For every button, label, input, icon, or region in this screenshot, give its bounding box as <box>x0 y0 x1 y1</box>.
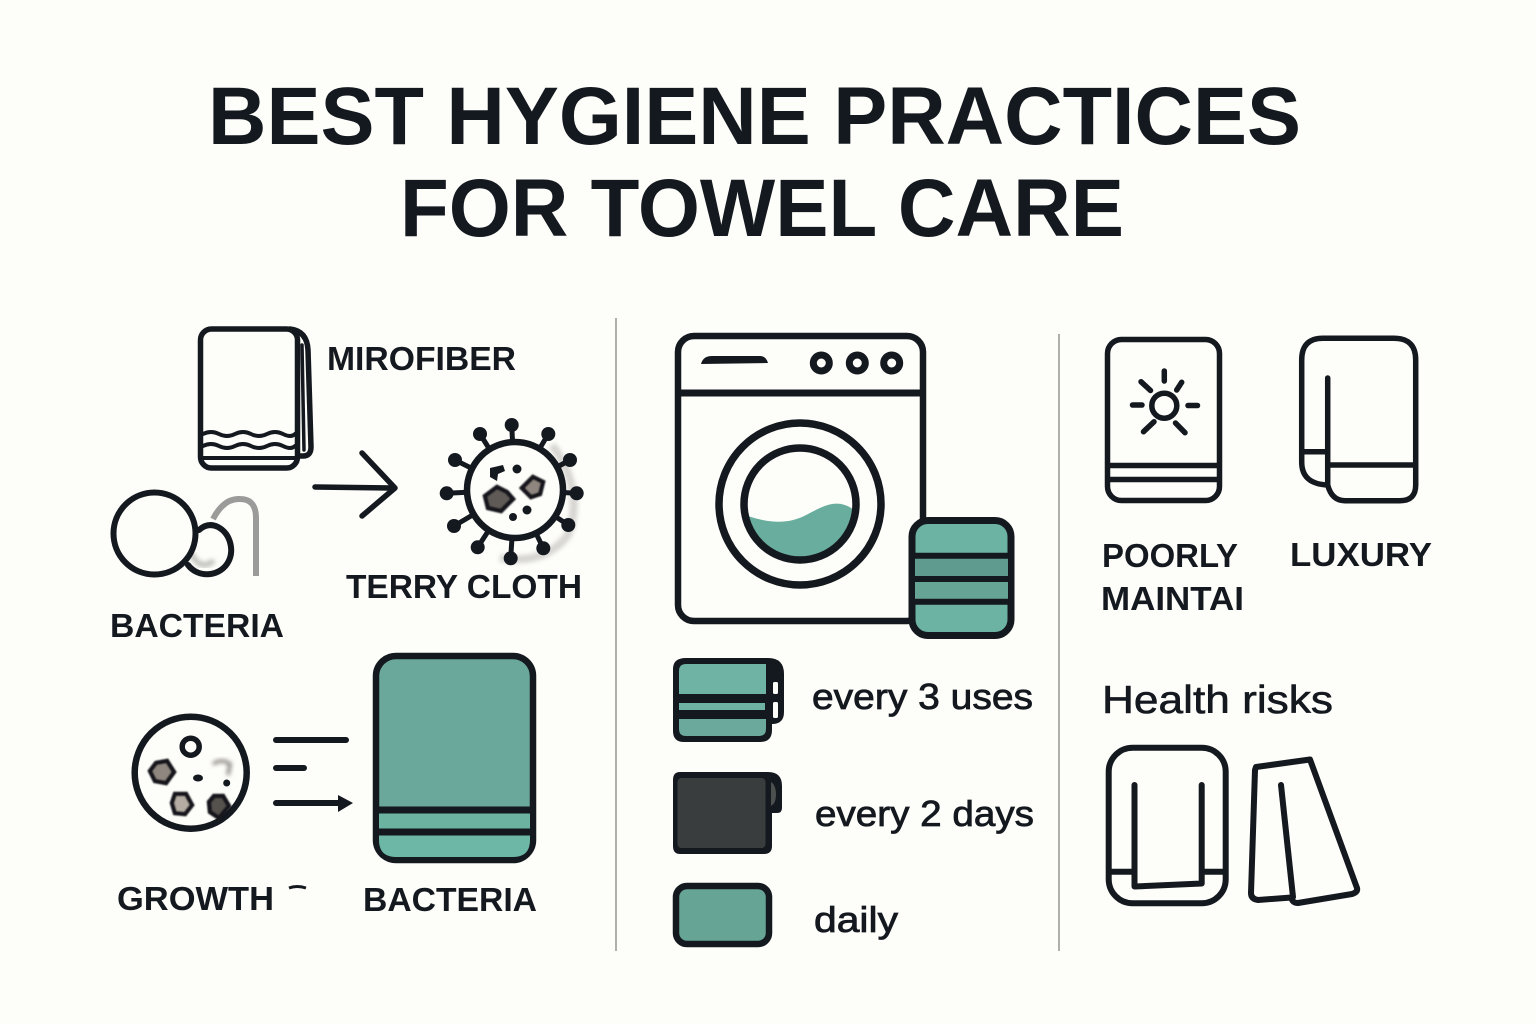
label: every 2 days: every 2 days <box>815 793 1034 834</box>
label: luxury: LUXURY <box>1290 536 1432 573</box>
label: poorly maintained <box>1101 537 1244 617</box>
icon: overlapping circles <box>114 492 256 576</box>
title: FOR TOWEL CARE <box>400 163 1124 254</box>
icon: folded towel <box>1251 760 1357 903</box>
icon: luxury towel <box>1302 338 1416 501</box>
label: terry cloth: TERRY CLOTH <box>346 568 582 605</box>
title: BEST HYGIENE PRACTICES <box>208 71 1301 162</box>
icon: teal towel small <box>676 886 769 944</box>
title <box>208 71 1301 254</box>
label: poorly maintained: MAINTAI <box>1101 580 1244 617</box>
label: poorly maintained: POORLY <box>1102 537 1238 574</box>
infographic canvas <box>110 87 1432 951</box>
panel: washing frequency <box>673 336 1034 944</box>
icon: striped folded towel <box>673 658 784 742</box>
icon: teal towel <box>376 656 533 860</box>
panel: towel materials and bacteria <box>110 329 584 918</box>
label: growth: GROWTH <box>117 880 274 917</box>
icon: dark towel <box>673 772 782 854</box>
label: every 3 uses: every 3 uses <box>812 676 1033 717</box>
icon: washing machine <box>678 336 923 621</box>
label: bacteria second: BACTERIA <box>363 881 537 918</box>
icon: bacteria culture circle <box>135 717 247 829</box>
label: bacteria: BACTERIA <box>110 607 284 644</box>
heading: health risks: Health risks <box>1102 679 1333 722</box>
icon: hanging towel <box>1109 748 1226 903</box>
panel: risks <box>1101 338 1432 903</box>
icon: germ with spikes <box>440 418 584 565</box>
arrow: towel to germ <box>315 453 395 516</box>
arrow: growth lines <box>276 740 353 812</box>
icon: microfiber towel <box>200 329 311 468</box>
label: daily: daily <box>814 899 898 940</box>
label: microfiber: MIROFIBER <box>327 340 516 377</box>
icon: towel stack <box>912 520 1011 636</box>
icon: towel with sun <box>1108 340 1220 500</box>
